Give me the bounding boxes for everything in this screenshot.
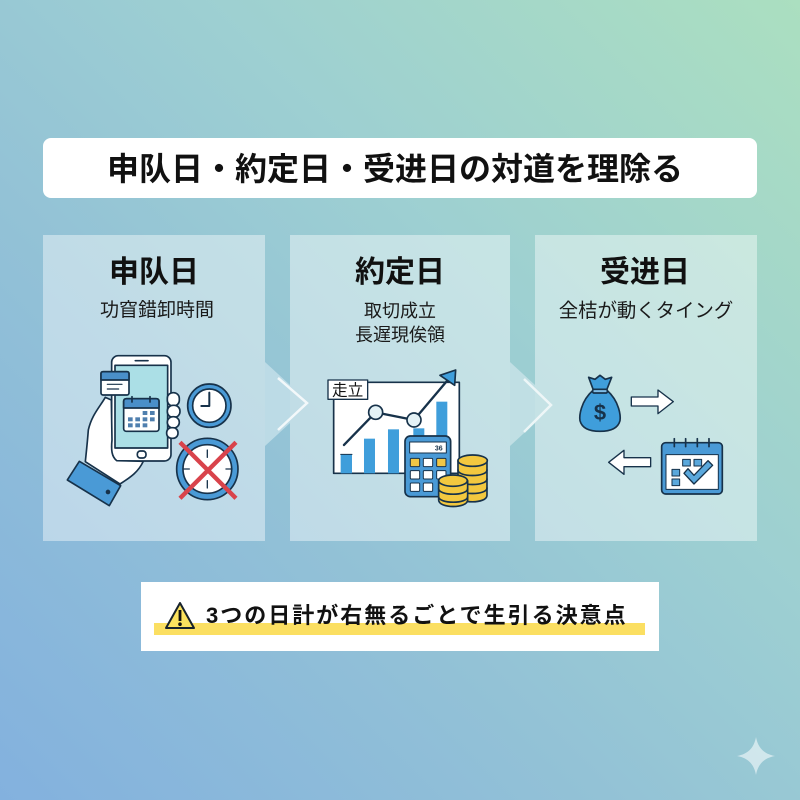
calendar with check xyxy=(662,439,722,494)
crossed out clock xyxy=(177,438,238,500)
callout box xyxy=(141,582,659,651)
calculator xyxy=(405,436,451,497)
panel: settlement date xyxy=(535,235,757,541)
yellow highlight xyxy=(154,623,645,635)
money bag xyxy=(580,375,620,431)
calculator: 36 xyxy=(435,445,443,452)
title text: 申队日・約定日・受进日の対道を理除る xyxy=(107,151,683,187)
icon: hand holding phone with clocks xyxy=(67,356,238,506)
coin stacks xyxy=(439,455,487,506)
left arrow xyxy=(609,450,651,474)
subtext: settlement date: 全桔が動くタイング xyxy=(559,300,733,322)
right arrow xyxy=(631,390,673,414)
calendar on screen xyxy=(124,397,159,431)
heading: trade date: 約定日 xyxy=(355,256,445,289)
clock xyxy=(188,384,231,427)
money bag: $ xyxy=(594,400,606,425)
arrow: second chevron xyxy=(510,362,551,446)
phone xyxy=(112,356,171,461)
heading: settlement date: 受进日 xyxy=(600,256,690,289)
callout text: 3つの日計が右無るごとで生引る決意点 xyxy=(206,603,628,628)
arrow: first chevron xyxy=(265,362,307,446)
message card xyxy=(101,372,129,395)
title bar xyxy=(43,138,757,198)
hand xyxy=(85,393,180,484)
icon: chart, calculator and coins xyxy=(328,370,487,506)
subtext: application date: 功窅錯卸時間 xyxy=(100,300,214,321)
subtext: trade date: 長遅現俟領 xyxy=(355,325,445,345)
icon: money bag, calendar and arrows xyxy=(580,375,722,494)
panel: trade date xyxy=(290,235,510,541)
chart label xyxy=(328,380,368,399)
panel: application date xyxy=(43,235,265,541)
cuff xyxy=(67,461,121,506)
heading: application date: 申队日 xyxy=(109,256,199,289)
subtext: trade date xyxy=(355,301,445,345)
chart xyxy=(334,370,459,473)
subtext: trade date: 取切成立 xyxy=(364,301,436,321)
icon: sparkle watermark xyxy=(738,738,774,774)
chart label: 走立 xyxy=(332,381,363,399)
icon: warning triangle xyxy=(165,602,195,629)
